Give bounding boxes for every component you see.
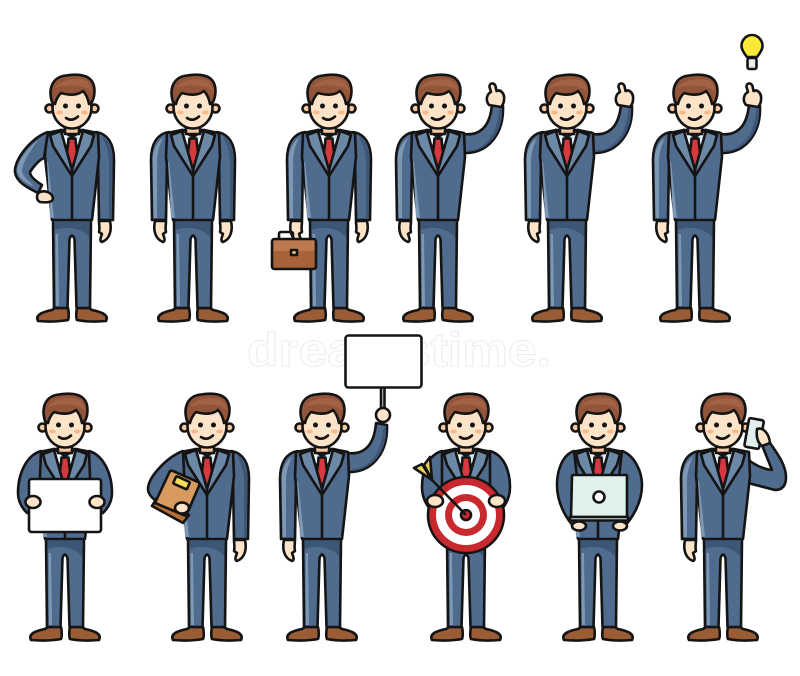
phone arm: [743, 443, 786, 490]
figure: thumb raised: [396, 75, 504, 322]
watermark: dreamstime.: [247, 323, 551, 376]
arms: [422, 451, 510, 511]
hand: [757, 429, 770, 446]
hands: [572, 522, 627, 530]
blank board: [29, 479, 101, 532]
figure: holding blank board: [18, 394, 112, 641]
icon: phone: [744, 418, 764, 449]
icon: laptop: [570, 475, 628, 520]
figure: hand on hip: [15, 75, 114, 322]
arms: [18, 451, 112, 513]
figure: holding target: [414, 394, 510, 641]
icon: briefcase: [272, 232, 316, 269]
hands: [26, 496, 104, 508]
icon: target with arrow: [414, 457, 504, 553]
sign board: [346, 336, 422, 388]
hand: [175, 502, 189, 514]
icon: light bulb: [742, 35, 762, 69]
figure: finger raised: [525, 75, 633, 322]
figure: with idea: [653, 35, 762, 322]
sign pole: [381, 386, 384, 410]
figure: holding sign on pole: [280, 336, 422, 641]
hands: [427, 495, 505, 507]
arm: [148, 451, 185, 513]
fist: [376, 408, 390, 422]
arms: [557, 451, 642, 529]
icon: book: [152, 471, 199, 523]
figure: holding laptop: [557, 394, 642, 641]
figure: with briefcase: [272, 75, 371, 322]
arm on hip: [15, 132, 53, 202]
figure: on the phone: [681, 394, 786, 641]
figure: holding book: [148, 394, 249, 641]
figure: standing: [151, 75, 235, 322]
